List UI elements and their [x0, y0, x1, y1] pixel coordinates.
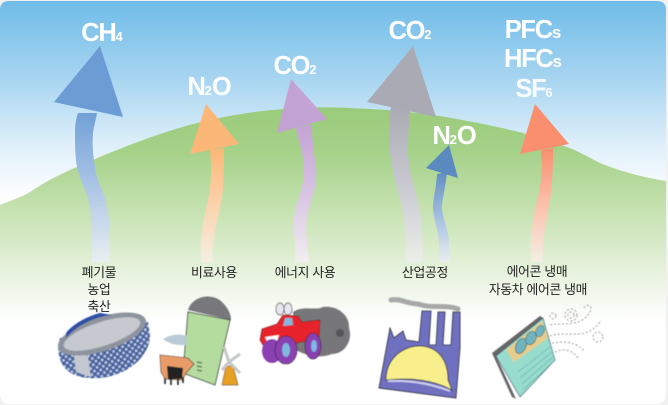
text: waste, agriculture, livestock: 축산	[88, 299, 111, 314]
text: energy use: 에너지 사용	[275, 265, 336, 280]
icon: air conditioner with air flow	[492, 305, 603, 399]
green hill	[0, 107, 666, 322]
text: waste, agriculture, livestock	[82, 265, 117, 314]
gas label: CH4: CH4	[81, 19, 124, 47]
gas labels: PFCs HFCs SF6: HFCs	[504, 45, 562, 73]
gas labels: PFCs HFCs SF6	[504, 16, 562, 103]
text: refrigerants	[489, 264, 587, 297]
arrow: CH4 blue	[54, 46, 123, 262]
gas label: N2O: N2O	[433, 122, 476, 150]
arrow: CO2 purple	[277, 79, 327, 262]
text: refrigerants: 자동차 에어콘 냉매	[489, 282, 587, 297]
text: industrial process: 산업공정	[402, 265, 448, 280]
icon: round filter	[53, 304, 151, 378]
arrow: N2O orange	[190, 104, 239, 262]
text: waste, agriculture, livestock: 폐기물	[82, 265, 117, 280]
gas labels: PFCs HFCs SF6: SF6	[515, 75, 553, 103]
text: fertilizer use: 비료사용	[191, 265, 237, 280]
gas label: CO2: CO2	[389, 17, 431, 45]
text: waste, agriculture, livestock: 농업	[88, 282, 110, 297]
gas labels: PFCs HFCs SF6: PFCs	[505, 16, 561, 44]
arrow: PFCs HFCs SF6 red	[520, 104, 569, 262]
text: refrigerants: 에어콘 냉매	[507, 264, 567, 279]
arrow: N2O blue	[426, 145, 458, 262]
gas label: N2O: N2O	[188, 73, 231, 101]
gas label: CO2: CO2	[274, 52, 316, 80]
arrow: CO2 gray	[367, 46, 436, 262]
icon: factory and hard hat	[379, 300, 460, 398]
icon: silo, cow and windmill	[160, 296, 240, 385]
icon: red truck with smoke	[260, 303, 350, 364]
